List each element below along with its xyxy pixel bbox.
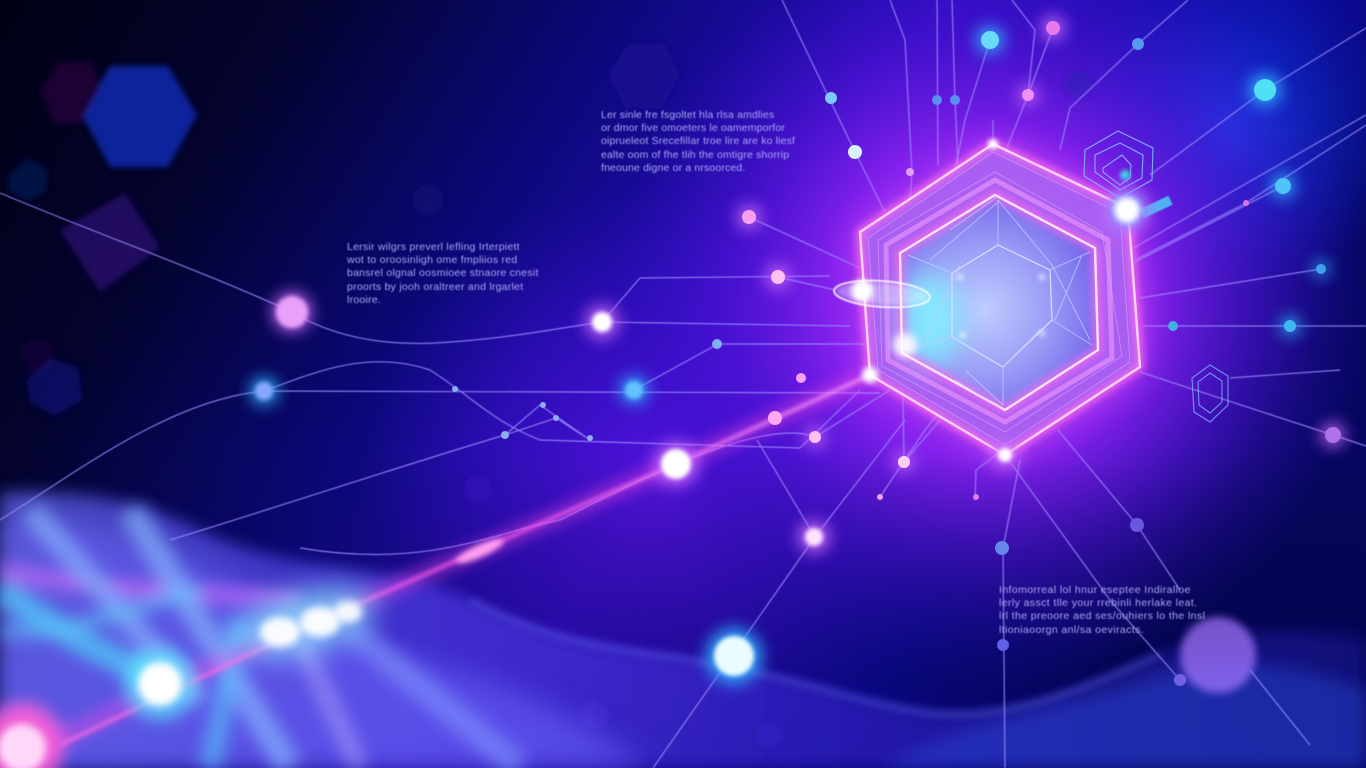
text block lower right: lerly assct tlle your rrebinli herlake leat. [999,597,1198,609]
text block left: wot to oroosinligh ome fmpliios red [347,254,517,266]
glowing ring at hexagon left [833,278,931,310]
text block left [346,241,539,306]
text block lower right: Infomorreal lol hnur eseptee Indiralloe [999,584,1191,596]
glowing nodes [250,16,1345,693]
main beam [0,375,870,768]
decorative hexagons left [8,44,1091,747]
text block top: fneoune digne or a nrsoorced. [601,162,745,174]
text block top [600,109,796,174]
text block left: bansrel olgnal oosmioee stnaore cnesit [347,267,539,279]
text block top: oiprueleot Srecefillar troe lire are ko liesf [601,135,795,147]
small outlined hexagon lower right [1192,365,1228,422]
text block left: proorts by jooh oraltreer and lrgarlet [347,281,523,293]
text block left: lrooire. [347,294,381,306]
bottom waves [0,492,1366,768]
text block top: Ler sinle fre fsgoltet hla rlsa amdlies [601,109,774,121]
text block left: Lersir wilgrs preverl lefling Irterpiett [347,241,520,253]
text block lower right [999,584,1205,636]
text block lower right: lrl the preoore aed ses/ouhiers lo the lnsl [999,610,1205,622]
text block lower right: ltioniaoorgn anl/sa oeviracts. [999,624,1144,636]
central hexagon [860,144,1140,455]
text block top: or dmor five omoeters le oamemporfor [601,122,785,134]
small outlined hexagon upper right [1084,131,1153,198]
text block top: ealte oom of fhe tlih the omtigre shorrip [601,149,789,161]
cyan label bar [1139,196,1173,218]
bottom left light bursts [0,535,506,768]
